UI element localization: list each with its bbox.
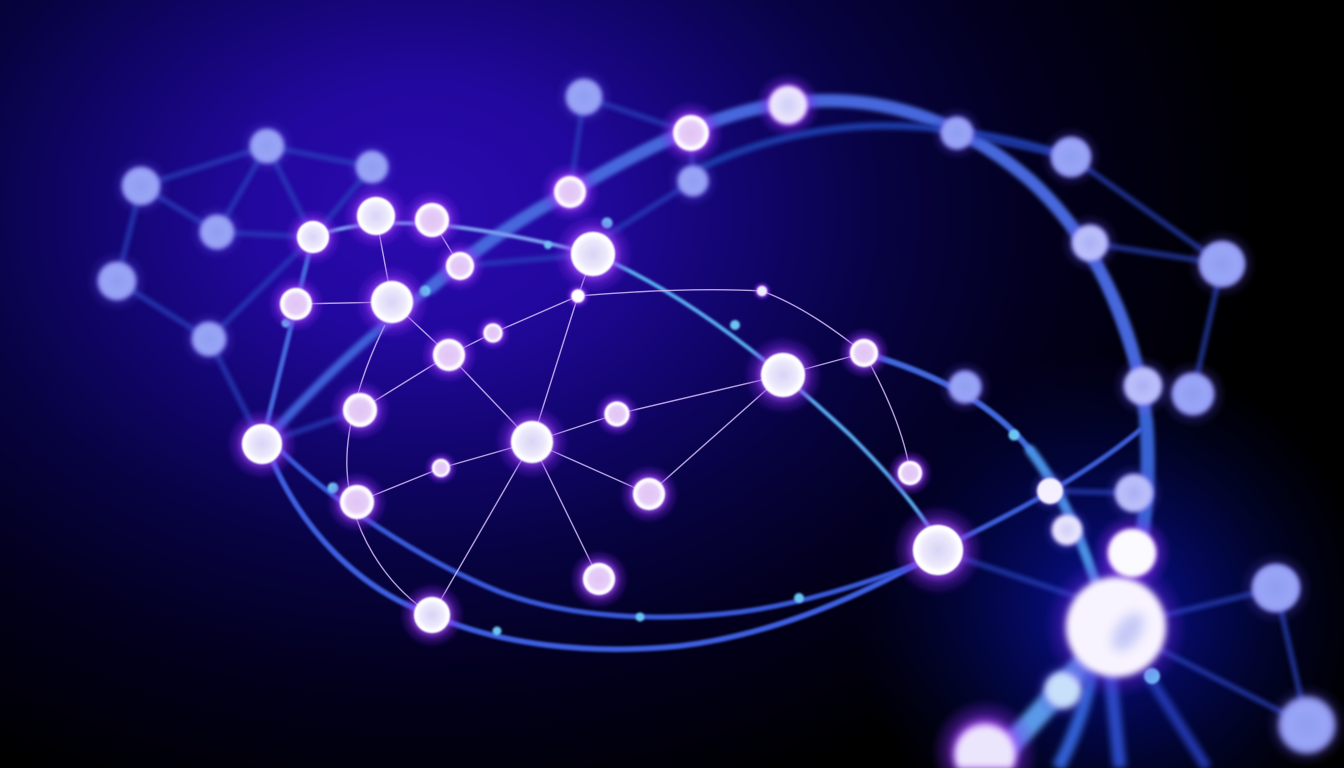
thin links [296, 216, 910, 615]
bottom branches [1000, 655, 1207, 768]
lower inner curve [275, 445, 915, 617]
blurred nodes: left cluster [86, 118, 398, 367]
middle arc lower part [593, 254, 940, 545]
blue links around left cluster [262, 237, 313, 444]
central sharp nodes [226, 182, 984, 648]
lower outer curve [268, 450, 915, 649]
thin upper arc [700, 126, 1071, 168]
far links [117, 97, 1307, 725]
hub background glow [850, 350, 1344, 768]
middle arc [313, 223, 593, 254]
bright soft nodes [540, 72, 1093, 768]
blurred nodes: top and right [555, 68, 1344, 767]
thick arc [268, 101, 1148, 560]
crossing link [938, 430, 1140, 550]
right curve [864, 353, 1030, 450]
right curve near hub [1030, 450, 1098, 590]
small teal dots [282, 218, 1160, 684]
large hub node [1044, 513, 1188, 699]
